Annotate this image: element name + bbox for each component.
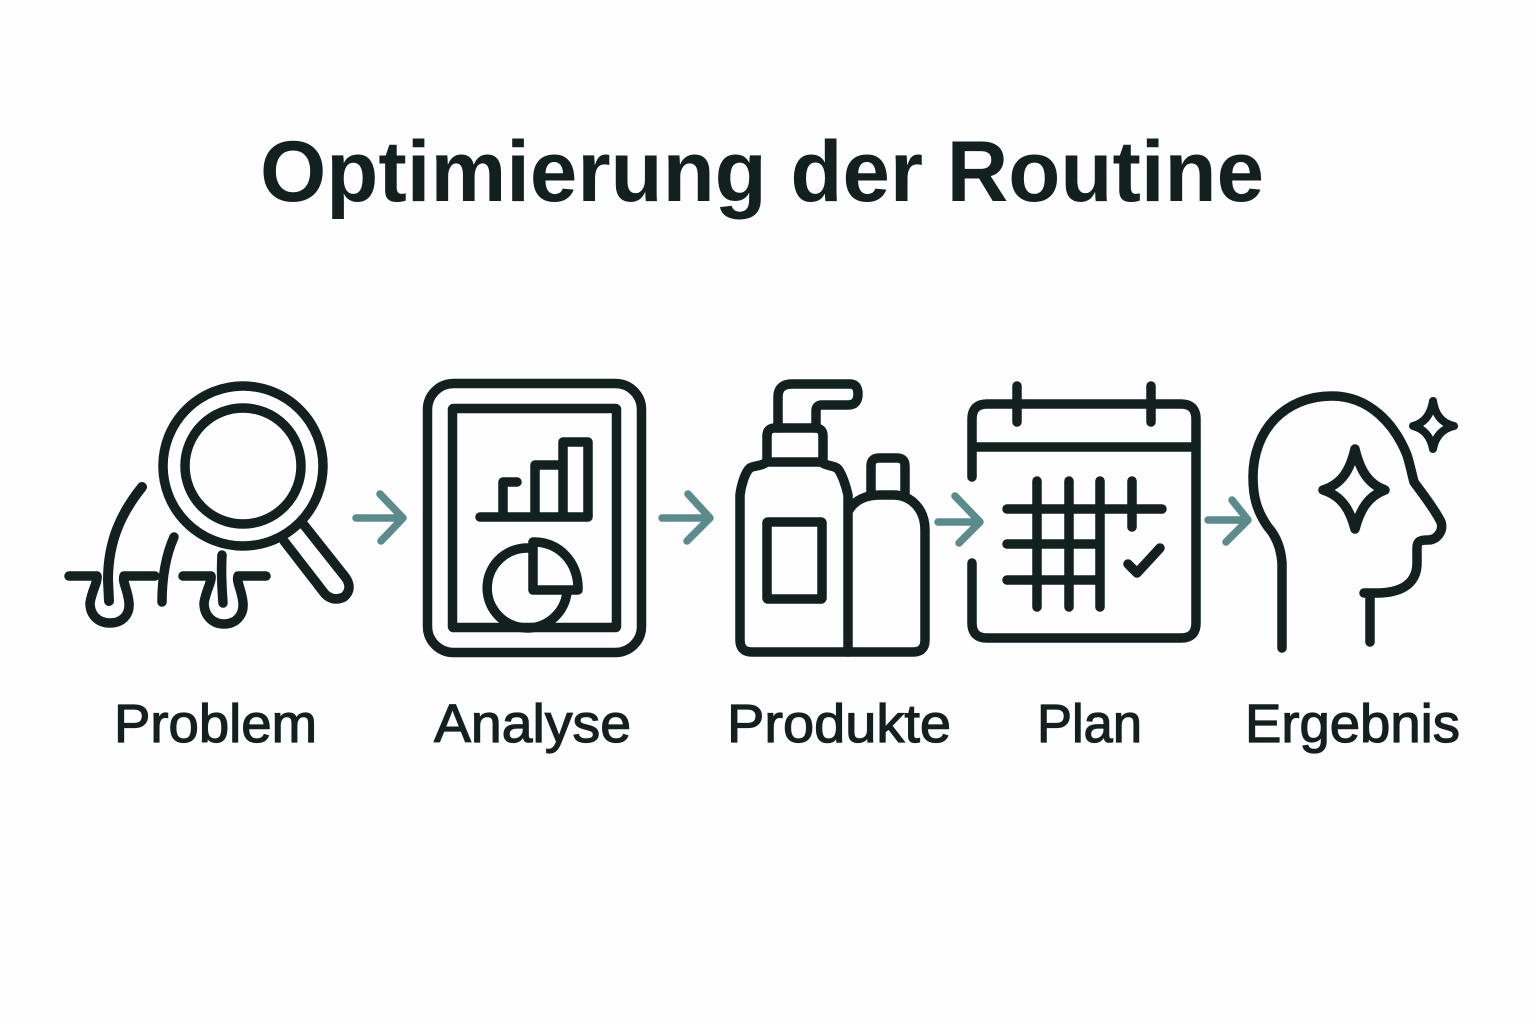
calendar grid [1007, 481, 1162, 607]
neck front [1365, 597, 1375, 642]
check mark [1128, 548, 1160, 573]
binder rings [1017, 386, 1151, 422]
magnifying glass [163, 386, 349, 599]
label: Plan: Plan [1037, 694, 1142, 754]
tablet frame [428, 384, 642, 652]
right follicle with hair [183, 555, 266, 624]
icon: analysis tablet with charts [428, 384, 642, 652]
bottle label [767, 522, 822, 599]
arrow: products to plan [938, 496, 980, 543]
calendar frame [972, 404, 1196, 638]
label: Analyse: Analyse [434, 694, 631, 754]
arrow: analysis to products [662, 494, 710, 541]
head profile [1253, 396, 1442, 648]
header line [972, 442, 1196, 452]
title: Optimierung der Routine [260, 124, 1264, 220]
icon: product bottles [740, 384, 925, 652]
bar chart [480, 442, 588, 517]
label: Problem: Problem [114, 694, 317, 754]
label: Produkte: Produkte [727, 694, 951, 754]
pie chart [487, 542, 578, 628]
pump head [778, 384, 858, 428]
arrow: plan to result [1208, 500, 1248, 542]
arrow: problem to analysis [356, 494, 403, 541]
icon: hair follicles under magnifying glass [69, 386, 349, 624]
pump collar [767, 428, 823, 462]
inner screen [452, 408, 616, 628]
small bottle [848, 458, 925, 652]
large sparkle [1323, 449, 1385, 529]
icon: head with sparkles [1253, 396, 1454, 648]
left follicle with hair [69, 487, 155, 623]
large bottle [740, 462, 848, 652]
icon: calendar [972, 386, 1196, 638]
loose hair [162, 537, 174, 602]
label: Ergebnis: Ergebnis [1245, 694, 1460, 754]
small sparkle [1413, 401, 1454, 449]
